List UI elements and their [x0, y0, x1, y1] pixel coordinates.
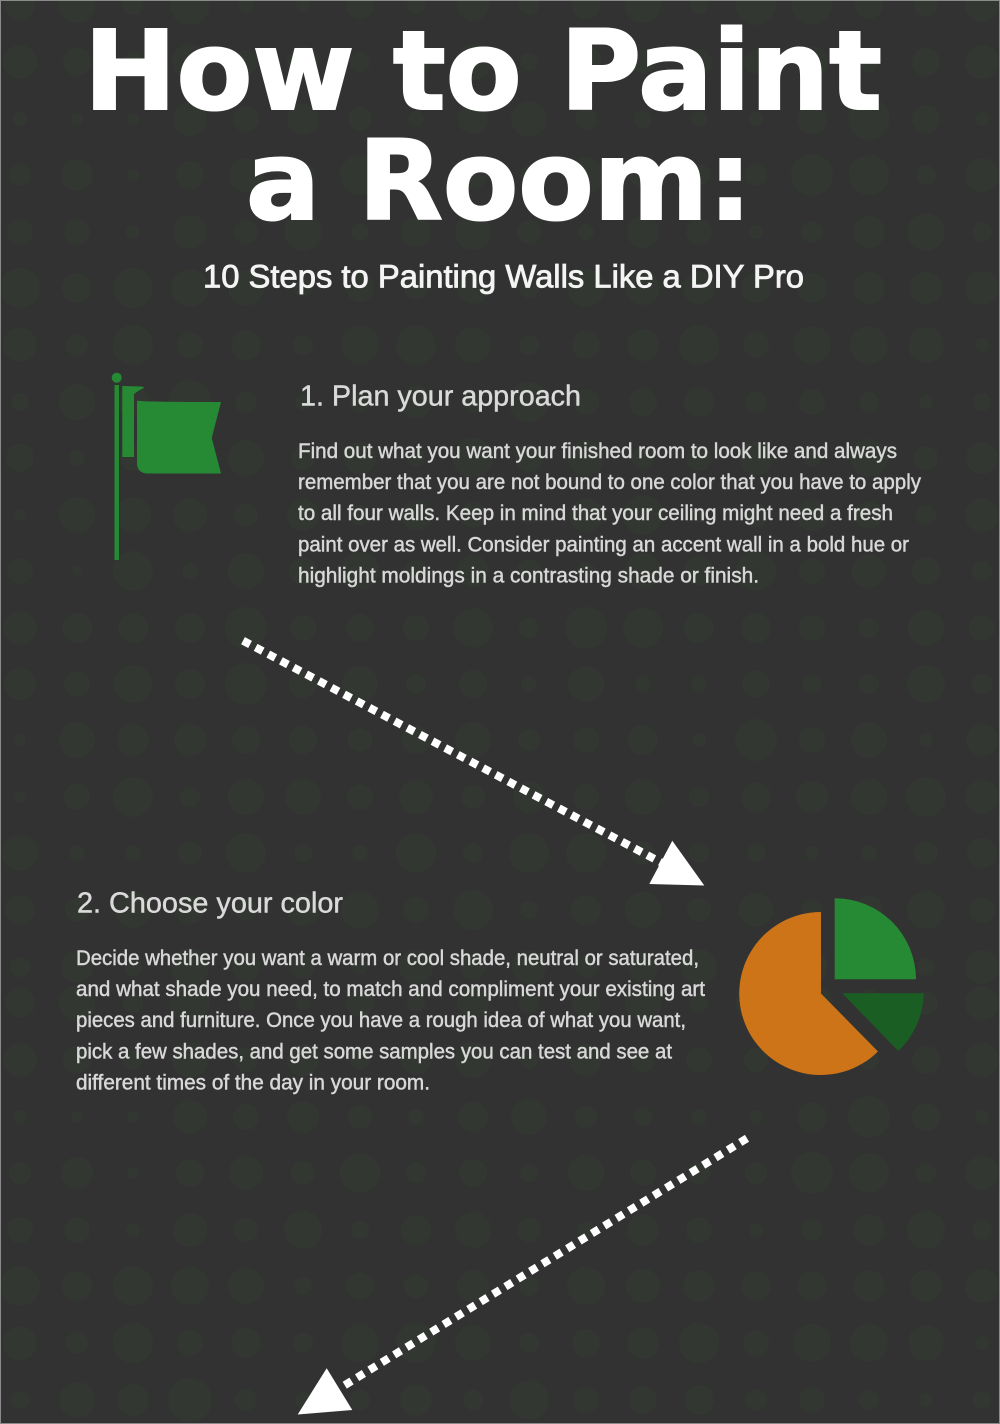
step 2 text: pieces and furniture. Once you have a rough idea of what you want,: [76, 1008, 686, 1032]
icon: green flag: [112, 373, 221, 560]
step 2 text: different times of the day in your room.: [76, 1070, 430, 1094]
title: [84, 7, 882, 245]
step 1 text: remember that you are not bound to one color that you have to apply: [298, 470, 921, 494]
arrow: step 2 to step 3: [298, 1138, 747, 1414]
step 1 heading: 1. Plan your approach: [300, 380, 581, 412]
step 2 text: Decide whether you want a warm or cool shade, neutral or saturated,: [76, 946, 699, 970]
step 2 heading: 2. Choose your color: [77, 888, 343, 920]
step 1 text: Find out what you want your finished room to look like and always: [298, 439, 897, 463]
step 1 text: paint over as well. Consider painting an accent wall in a bold hue or: [298, 532, 909, 556]
step 1 text: [298, 439, 921, 588]
arrow: step 1 to step 2: [243, 641, 704, 886]
title: How to Paint: [84, 7, 882, 135]
step 2 text: pick a few shades, and get some samples you can test and see at: [76, 1040, 672, 1064]
step 1 text: to all four walls. Keep in mind that your ceiling might need a fresh: [298, 501, 893, 525]
step 1 text: highlight moldings in a contrasting shade or finish.: [298, 564, 759, 588]
step 2 text: [76, 946, 705, 1094]
step 2 text: and what shade you need, to match and compliment your existing art: [76, 977, 705, 1001]
subtitle: 10 Steps to Painting Walls Like a DIY Pro: [203, 258, 804, 294]
title: a Room:: [246, 117, 752, 245]
icon: pie chart: [739, 898, 924, 1075]
